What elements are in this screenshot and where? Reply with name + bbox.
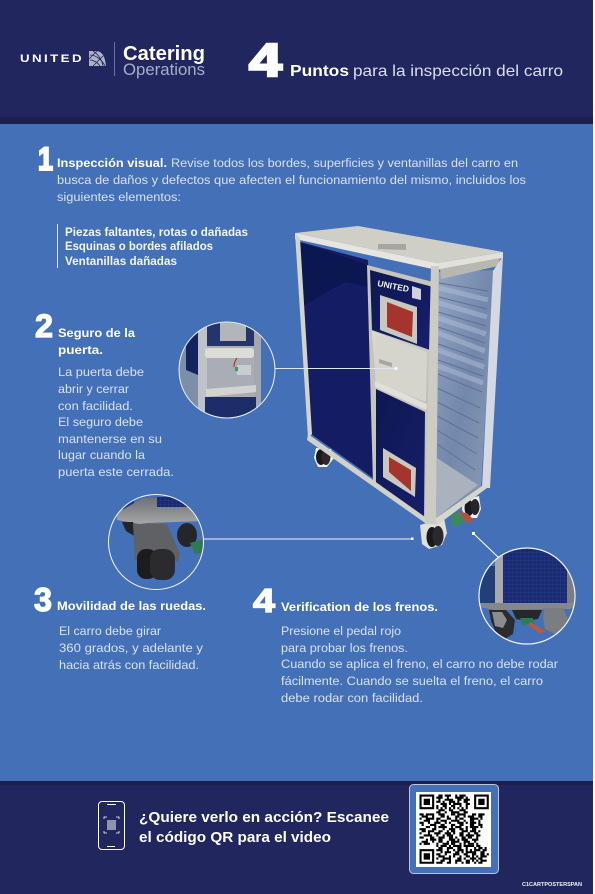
body: 360 grados, y adelante y: [59, 641, 204, 655]
footer call to action: [139, 809, 389, 846]
centre post: [425, 266, 439, 524]
section 2: door lock: [35, 308, 174, 479]
left frame: [295, 233, 312, 438]
body: para probar los frenos.: [281, 641, 408, 655]
lower window: [383, 448, 416, 497]
icon: phone with QR: [98, 802, 124, 850]
circle detail: door lock: [179, 322, 275, 419]
body: puerta este cerrada.: [58, 465, 174, 479]
body: fácilmente. Cuando se suelta el freno, el carro: [281, 674, 543, 688]
number 2: 2: [35, 308, 53, 344]
intro text: [57, 156, 526, 204]
door frame: [367, 265, 437, 525]
heading: Verification de los frenos.: [281, 600, 438, 614]
heading: puerta.: [58, 343, 103, 357]
rear-left wheel: [314, 448, 334, 467]
rear-right wheel: [462, 496, 481, 518]
title: Puntos: [290, 63, 349, 80]
body: con facilidad.: [58, 399, 133, 413]
door logo: [377, 278, 421, 300]
body: Presione el pedal rojo: [281, 624, 401, 638]
drawer: [372, 331, 429, 405]
Catering Operations wordmark: Operations: [123, 60, 205, 79]
circle detail: wheel: [108, 494, 204, 590]
circle detail: brake: [479, 548, 575, 644]
United logo: [20, 51, 106, 66]
checklist: Piezas faltantes, rotas o dañadas: [65, 227, 248, 239]
catering cart illustration: [295, 226, 503, 549]
number 1: 1: [38, 141, 53, 177]
lower door: [376, 389, 425, 520]
body: debe rodar con facilidad.: [281, 691, 423, 705]
front wheel: [420, 518, 447, 549]
connector: door lock: [275, 367, 398, 370]
heading: Movilidad de las ruedas.: [57, 599, 206, 613]
checklist: Esquinas o bordes afilados: [65, 241, 213, 253]
right post: [482, 256, 503, 488]
number 4: 4: [253, 582, 276, 619]
body: [281, 624, 558, 705]
upper door: [370, 270, 433, 350]
QR code: [410, 784, 498, 874]
checklist: Ventanillas dañadas: [65, 256, 177, 268]
checklist: [57, 224, 248, 268]
body: [59, 624, 204, 672]
number 3: 3: [34, 581, 52, 618]
body: lugar cuando la: [58, 448, 145, 462]
intro text: Inspección visual.: [57, 156, 167, 170]
heading: [58, 326, 135, 357]
interior top light: [440, 258, 500, 279]
title: para la inspección del carro: [353, 63, 563, 80]
intro text: Revise todos los bordes, superficies y ventanillas del carro en: [171, 156, 518, 170]
connector: brake: [472, 532, 499, 558]
floor rail: [436, 486, 487, 526]
body: Cuando se aplica el freno, el carro no debe rodar: [281, 657, 558, 671]
United logo: UNITED: [20, 53, 84, 65]
connector: wheel: [204, 538, 414, 540]
heading: Seguro de la: [58, 326, 135, 340]
intro text: busca de daños y defectos que afecten el funcionamiento del mismo, incluidos los: [57, 173, 526, 187]
icon: globe: [89, 51, 106, 66]
Catering Operations wordmark: [123, 43, 205, 79]
logo divider: [114, 42, 115, 76]
top handle: [378, 244, 406, 250]
brake pedal: [451, 512, 474, 526]
body: [58, 365, 174, 479]
top right rim: [437, 252, 503, 270]
side panel left: [300, 242, 373, 478]
drawer rail: [375, 381, 427, 410]
body: hacia atrás con facilidad.: [59, 658, 199, 672]
top surface: [295, 226, 503, 263]
body: mantenerse en su: [58, 432, 162, 446]
door logo: UNITED: [377, 278, 410, 294]
body: El seguro debe: [58, 415, 143, 429]
upper window: [380, 295, 417, 344]
section 1: visual inspection: [38, 141, 526, 268]
section 3: wheel mobility: [34, 581, 206, 672]
body: abrir y cerrar: [58, 382, 129, 396]
footer call to action: ¿Quiere verlo en acción? Escanee: [139, 809, 389, 826]
footer band: [0, 781, 593, 894]
header band: [0, 0, 593, 124]
bottom frame: [307, 434, 428, 525]
poster code: C1CARTPOSTERSPAN: [522, 882, 582, 888]
cart interior with shelves: [435, 270, 494, 519]
title: [249, 34, 563, 86]
panel upper shade: [300, 242, 368, 306]
body: El carro debe girar: [59, 624, 161, 638]
body: La puerta debe: [58, 365, 144, 379]
title: 4: [249, 34, 283, 86]
intro text: siguientes elementos:: [57, 190, 181, 204]
top front rim: [295, 233, 437, 270]
section 4: brakes: [253, 582, 558, 705]
footer call to action: el código QR para el video: [139, 829, 331, 846]
Catering Operations wordmark: Catering: [123, 43, 205, 65]
